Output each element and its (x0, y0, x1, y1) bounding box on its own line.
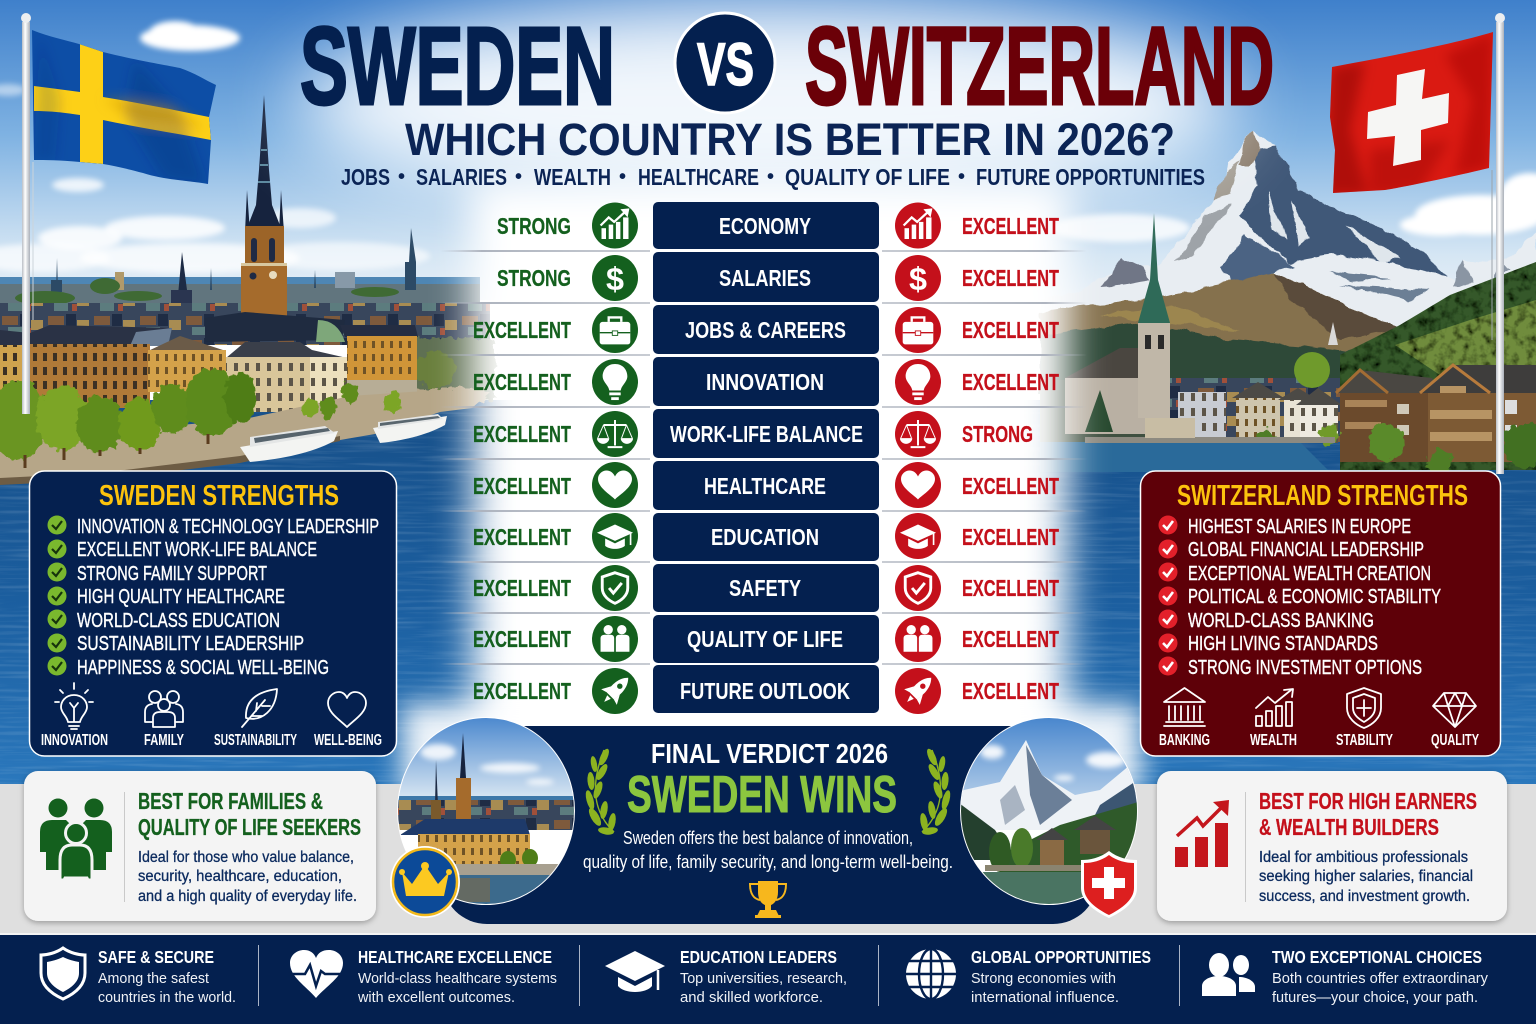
row: education: EXCELLENT (962, 524, 1059, 550)
background: sky (0, 0, 1536, 300)
icon: sustainability (242, 689, 277, 727)
icon labels: Switzerland: BANKING (1159, 732, 1210, 749)
row: healthcare: EXCELLENT (962, 473, 1059, 499)
village trees (1255, 423, 1536, 474)
footer item: education leaders: Top universities, research, (680, 970, 847, 987)
icon: quality (1433, 693, 1476, 727)
subtitle topics (341, 164, 1205, 190)
flagpole: Switzerland (1492, 13, 1505, 474)
row: salaries: STRONG (497, 265, 571, 291)
row: healthcare: HEALTHCARE (704, 473, 826, 499)
comparison table (440, 202, 1087, 714)
icon: well-being (328, 692, 366, 727)
subtitle topics: FUTURE OPPORTUNITIES (976, 164, 1205, 190)
row: innovation: INNOVATION (706, 369, 824, 395)
centre glow behind title (298, 0, 1238, 210)
golden right block (340, 325, 418, 396)
verdict winner: SWEDEN WINS (627, 766, 897, 824)
verdict description: quality of life, family security, and long-term well-being. (583, 852, 953, 872)
row: economy: EXCELLENT (962, 213, 1059, 239)
circle photo: Matterhorn (960, 717, 1138, 905)
icon labels: Switzerland (1159, 732, 1479, 749)
icon: wealth (1256, 689, 1293, 726)
checklist: Sweden: STRONG FAMILY SUPPORT (77, 563, 267, 585)
icon labels: Sweden (41, 732, 382, 749)
row: salaries: $ (606, 261, 624, 297)
subtitle topics: QUALITY OF LIFE (785, 164, 950, 190)
row: education: EXCELLENT (473, 524, 571, 550)
icon labels: Switzerland: STABILITY (1336, 732, 1393, 749)
footer item: education leaders (605, 947, 847, 1006)
footer item: safe and secure: SAFE & SECURE (98, 947, 214, 967)
checklist: Sweden (48, 516, 379, 679)
checklist: Switzerland: GLOBAL FINANCIAL LEADERSHIP (1188, 539, 1424, 561)
row: salaries: EXCELLENT (962, 265, 1059, 291)
icon: laurel left (584, 747, 617, 836)
row: safety: SAFETY (729, 575, 801, 601)
footer item: global opportunities (906, 947, 1151, 1006)
VS badge (675, 13, 775, 113)
ferry boats (240, 414, 447, 462)
icon labels: Switzerland: QUALITY (1431, 732, 1479, 749)
checklist: Switzerland: HIGH LIVING STANDARDS (1188, 633, 1378, 655)
row: quality of life: EXCELLENT (473, 626, 571, 652)
card: best for high earners (1157, 771, 1507, 921)
village houses (1040, 322, 1342, 443)
row: healthcare: EXCELLENT (473, 473, 571, 499)
VS badge: VS (697, 31, 754, 98)
subtitle topics: HEALTHCARE (638, 164, 759, 190)
grey lower band (0, 784, 1536, 936)
subtitle question: WHICH COUNTRY IS BETTER IN 2026? (405, 114, 1175, 165)
checklist: Sweden: SUSTAINABILITY LEADERSHIP (77, 633, 304, 655)
panel: final verdict (442, 726, 1098, 924)
row: education: EDUCATION (711, 524, 819, 550)
subtitle topics: • (619, 166, 626, 188)
row: jobs and careers (473, 305, 1059, 354)
footer item: two exceptional choices: TWO EXCEPTIONAL CHOICES (1272, 947, 1482, 967)
row: work-life balance (473, 409, 1033, 458)
row: jobs and careers: EXCELLENT (962, 317, 1059, 343)
icon: trophy (750, 881, 786, 918)
flagpole: Sweden (21, 13, 33, 414)
footer item: education leaders: and skilled workforce. (680, 989, 823, 1006)
icon: family group (40, 798, 112, 880)
footer item: global opportunities: international influence. (971, 989, 1119, 1006)
row: salaries: $ (909, 261, 927, 297)
subtitle topics: SALARIES (416, 164, 507, 190)
checklist: Switzerland: STRONG INVESTMENT OPTIONS (1188, 657, 1422, 679)
flag: Switzerland (1330, 32, 1493, 193)
ochre palace block (0, 325, 226, 408)
checklist: Sweden: EXCELLENT WORK-LIFE BALANCE (77, 539, 317, 561)
icon: stability (1347, 688, 1381, 728)
forested hill (1340, 262, 1536, 470)
subtitle topics: WEALTH (534, 164, 611, 190)
flag: Sweden (32, 30, 216, 184)
cream buildings (226, 342, 347, 412)
subtitle topics: • (398, 166, 405, 188)
card: best for families (24, 771, 376, 921)
scene: Matterhorn and Swiss village (1040, 132, 1536, 474)
checklist: Sweden: HIGH QUALITY HEALTHCARE (77, 586, 285, 608)
panel: Switzerland strengths (1140, 471, 1500, 756)
heading: Sweden strengths: SWEDEN STRENGTHS (99, 480, 339, 512)
shoreline greenery (405, 338, 495, 402)
badge: Swiss shield (1081, 851, 1137, 918)
icon: laurel right (919, 747, 952, 836)
footer item: safe and secure: Among the safest (98, 970, 210, 987)
row: salaries: SALARIES (719, 265, 811, 291)
row: education (473, 513, 1059, 561)
row: future outlook (473, 665, 1059, 714)
row: work-life balance: EXCELLENT (473, 421, 571, 447)
footer item: two exceptional choices: futures—your choice, your path. (1272, 989, 1478, 1006)
subtitle topics: JOBS (341, 164, 390, 190)
row: safety: EXCELLENT (962, 575, 1059, 601)
subtitle topics: • (515, 166, 522, 188)
card text: families: security, healthcare, education, (138, 868, 342, 885)
checklist: Switzerland (1158, 516, 1441, 679)
clouds (0, 21, 1536, 273)
checklist: Switzerland: WORLD-CLASS BANKING (1188, 610, 1374, 632)
card title: high earners (1259, 788, 1477, 840)
footer strip (0, 933, 1536, 1024)
footer item: healthcare excellence (288, 947, 557, 1006)
card text: high earners: seeking higher salaries, financial (1259, 868, 1473, 885)
icon: innovation (55, 683, 93, 729)
card text: families: Ideal for those who value balance, (138, 849, 354, 866)
footer item: healthcare excellence: HEALTHCARE EXCELLENCE (358, 947, 552, 967)
subtitle topics: • (958, 166, 965, 188)
row: economy (497, 202, 1059, 249)
row: jobs and careers: JOBS & CAREERS (685, 317, 846, 343)
subtitle topics: • (767, 166, 774, 188)
circle photo: Stockholm (397, 717, 575, 905)
checklist: Switzerland: HIGHEST SALARIES IN EUROPE (1188, 516, 1411, 538)
row: economy: STRONG (497, 213, 571, 239)
footer item: two exceptional choices (1202, 947, 1488, 1006)
lake church (1065, 213, 1195, 438)
title: SWEDEN: SWEDEN (300, 5, 615, 128)
icon labels: Sweden: INNOVATION (41, 732, 108, 749)
scene: Stockholm city skyline (0, 95, 495, 485)
row: future outlook: FUTURE OUTLOOK (680, 678, 850, 704)
card text: families (138, 849, 357, 905)
footer item: two exceptional choices: Both countries offer extraordinary (1272, 970, 1488, 987)
mountain (1040, 132, 1536, 340)
checklist: Sweden: INNOVATION & TECHNOLOGY LEADERSHIP (77, 516, 379, 538)
row: work-life balance: STRONG (962, 421, 1033, 447)
verdict description (583, 828, 953, 872)
row: quality of life: EXCELLENT (962, 626, 1059, 652)
card title: high earners: & WEALTH BUILDERS (1259, 814, 1439, 840)
row: innovation (473, 357, 1059, 406)
church tower and spire (241, 95, 287, 320)
footer item: healthcare excellence: World-class healthcare systems (358, 970, 557, 987)
footer item: global opportunities: Strong economies with (971, 970, 1116, 987)
card text: high earners: Ideal for ambitious professionals (1259, 849, 1468, 866)
row: future outlook: EXCELLENT (473, 678, 571, 704)
verdict description: Sweden offers the best balance of innovation, (623, 828, 913, 848)
quay (0, 390, 490, 483)
row: healthcare (473, 461, 1059, 510)
row: safety (473, 564, 1059, 612)
card text: families: and a high quality of everyday life. (138, 888, 357, 905)
checklist: Sweden: HAPPINESS & SOCIAL WELL-BEING (77, 657, 329, 679)
row: work-life balance: WORK-LIFE BALANCE (670, 421, 863, 447)
trees (0, 368, 401, 460)
checklist: Switzerland: EXCEPTIONAL WEALTH CREATION (1188, 563, 1431, 585)
icon labels: Sweden: SUSTAINABILITY (214, 732, 297, 749)
chalets (1336, 365, 1536, 462)
row: jobs and careers: EXCELLENT (473, 317, 571, 343)
footer item: global opportunities: GLOBAL OPPORTUNITIES (971, 947, 1151, 967)
row: salaries (497, 252, 1059, 302)
footer item: healthcare excellence: with excellent outcomes. (357, 989, 515, 1006)
badge: Swedish crown (390, 846, 460, 918)
row: economy: ECONOMY (719, 213, 811, 239)
centre comparison backdrop (402, 182, 1140, 794)
card text: high earners: success, and investment growth. (1259, 888, 1470, 905)
card text: high earners (1259, 849, 1473, 905)
row: future outlook: EXCELLENT (962, 678, 1059, 704)
row: innovation: EXCELLENT (473, 369, 571, 395)
icon labels: Sweden: FAMILY (144, 732, 184, 749)
footer item: safe and secure (41, 947, 236, 1006)
panel: Sweden strengths (30, 471, 396, 756)
card title: families: BEST FOR FAMILIES & (138, 788, 323, 814)
icon: family (145, 691, 183, 727)
ridge and valley (1040, 272, 1420, 395)
icon labels: Sweden: WELL-BEING (314, 732, 382, 749)
card title: families (138, 788, 361, 840)
verdict heading: FINAL VERDICT 2026 (651, 738, 888, 769)
icon: banking (1164, 688, 1205, 726)
lake front (1040, 442, 1330, 472)
icon: rising bar chart (1175, 800, 1229, 867)
row: quality of life: QUALITY OF LIFE (687, 626, 843, 652)
footer item: education leaders: EDUCATION LEADERS (680, 947, 837, 967)
card title: families: QUALITY OF LIFE SEEKERS (138, 814, 361, 840)
row: quality of life (473, 615, 1059, 663)
row: innovation: EXCELLENT (962, 369, 1059, 395)
checklist: Sweden: WORLD-CLASS EDUCATION (77, 610, 280, 632)
row: safety: EXCELLENT (473, 575, 571, 601)
checklist: Switzerland: POLITICAL & ECONOMIC STABILITY (1188, 586, 1441, 608)
footer item: safe and secure: countries in the world. (98, 989, 236, 1006)
icon labels: Switzerland: WEALTH (1250, 732, 1297, 749)
background: harbour water (0, 400, 1536, 800)
